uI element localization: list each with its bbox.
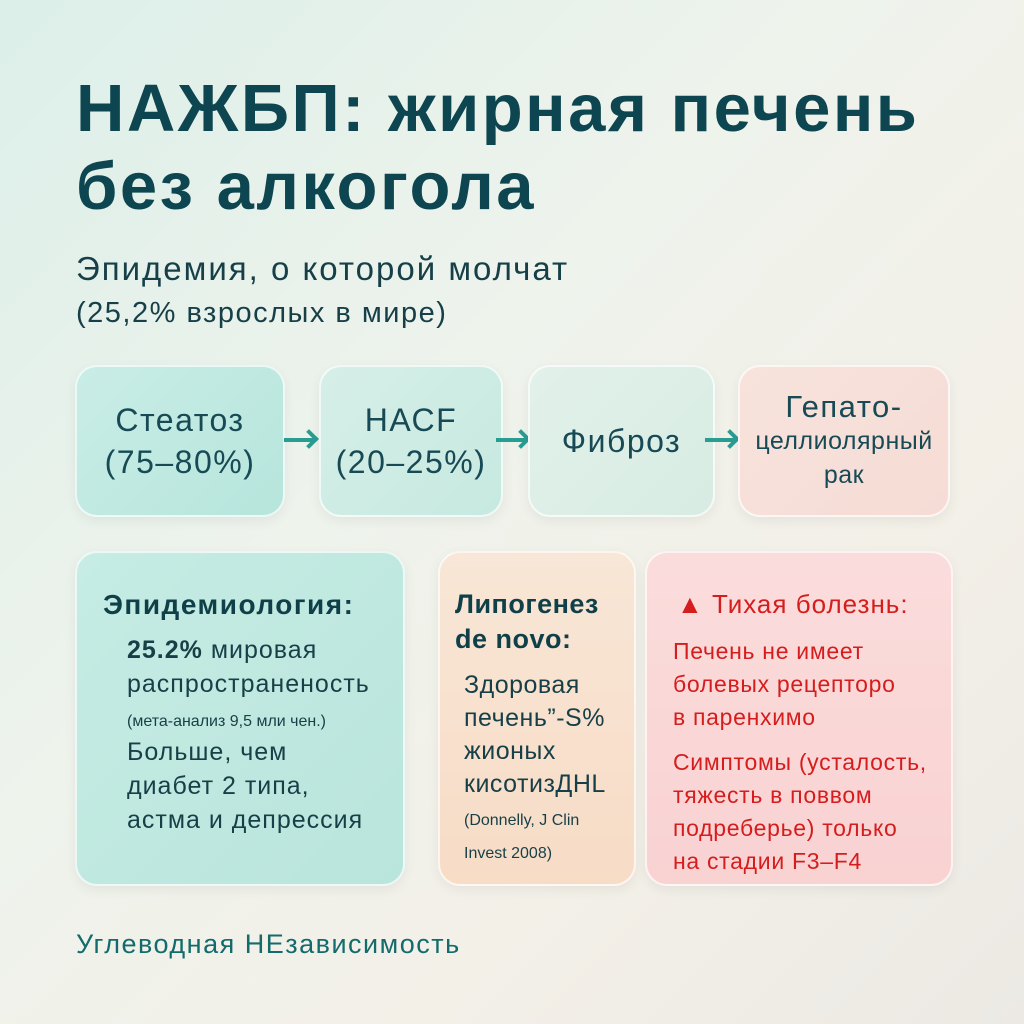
title: без алкогола bbox=[76, 149, 536, 224]
arrow 3 bbox=[705, 438, 735, 442]
arrow 2 bbox=[496, 438, 526, 442]
subtitle bbox=[76, 250, 569, 329]
heading bbox=[455, 589, 599, 654]
body: Invest 2008) bbox=[464, 845, 552, 862]
body: Печень не имеет bbox=[673, 638, 864, 664]
panel: lipogenesis bbox=[438, 551, 636, 886]
heading: Эпидемиология: bbox=[103, 589, 354, 620]
heading: de novo: bbox=[455, 624, 572, 654]
body: Симптомы (усталость, bbox=[673, 749, 927, 775]
stage: NASH: (20–25%) bbox=[336, 444, 486, 480]
heading: Липогенез bbox=[455, 589, 599, 619]
stage: cancer bbox=[738, 365, 950, 517]
footer: Углеводная НЕзависимость bbox=[76, 929, 461, 959]
body: на стадии F3–F4 bbox=[673, 848, 862, 874]
subtitle: (25,2% взрослых в мире) bbox=[76, 297, 447, 329]
body bbox=[464, 671, 606, 862]
stage: steatosis: Стеатоз bbox=[115, 402, 245, 438]
body: 25.2% мировая bbox=[127, 636, 317, 664]
subtitle: Эпидемия, о которой молчат bbox=[76, 250, 569, 287]
body: подреберье) только bbox=[673, 815, 898, 841]
body: печень”-S% bbox=[464, 704, 605, 732]
body: кисотизДНL bbox=[464, 770, 606, 798]
body: Больше, чем bbox=[127, 738, 287, 766]
stage: steatosis: (75–80%) bbox=[105, 444, 255, 480]
body bbox=[127, 636, 370, 834]
stage: steatosis bbox=[75, 365, 285, 517]
heading with warning icon: ▲ Тихая болезнь: bbox=[677, 589, 909, 619]
body: болевых рецепторо bbox=[673, 671, 896, 697]
panel: epidemiology bbox=[75, 551, 405, 886]
stage: cancer: целлиолярный bbox=[755, 427, 933, 455]
title: НАЖБП: жирная печень bbox=[76, 71, 920, 146]
body: диабет 2 типа, bbox=[127, 772, 310, 800]
body: (Donnelly, J Clin bbox=[464, 812, 579, 829]
panel: silent disease bbox=[645, 551, 953, 886]
stage: NASH bbox=[319, 365, 503, 517]
title bbox=[76, 71, 920, 224]
body: тяжесть в поввом bbox=[673, 782, 872, 808]
stage: cancer: Гепато- bbox=[785, 389, 903, 424]
arrow 1 bbox=[284, 438, 314, 442]
body bbox=[673, 638, 927, 874]
stage: NASH: НАСF bbox=[365, 402, 457, 438]
body: в паренхимо bbox=[673, 704, 816, 730]
stage: cancer: рак bbox=[824, 461, 864, 489]
body: астма и депрессия bbox=[127, 806, 363, 834]
body: распространеность bbox=[127, 670, 370, 698]
body: (мета-анализ 9,5 мли чен.) bbox=[127, 713, 326, 730]
stage: fibrosis bbox=[528, 365, 715, 517]
body: Здоровая bbox=[464, 671, 580, 699]
body: жионых bbox=[464, 737, 556, 765]
stage: fibrosis: Фиброз bbox=[562, 423, 681, 459]
